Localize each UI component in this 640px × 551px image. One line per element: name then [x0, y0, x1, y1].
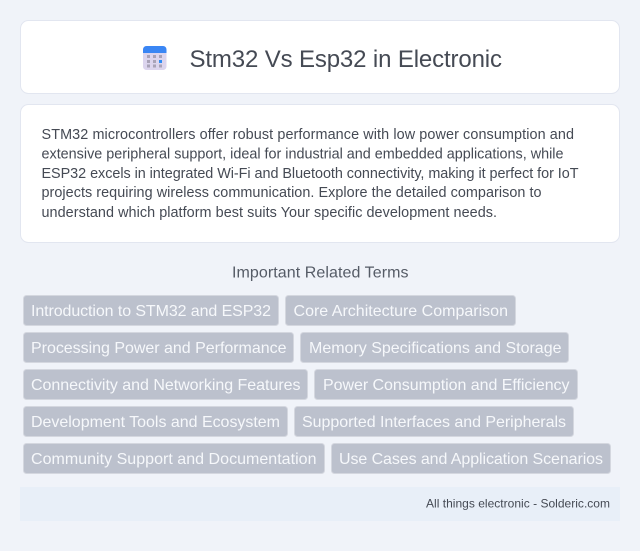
text block: description: ESP32 excels in integrated Wi-Fi and Bluetooth connectivity, making it perfect for IoT	[42, 166, 579, 182]
tag: Development Tools and Ecosystem	[31, 414, 280, 431]
tag: Connectivity and Networking Features	[31, 377, 300, 394]
tag: Introduction to STM32 and ESP32	[31, 303, 271, 320]
text block: description: projects requiring wireless communication. Explore the detailed comparison to	[42, 185, 542, 201]
tag	[332, 444, 610, 474]
tag: Core Architecture Comparison	[294, 303, 508, 320]
heading: related terms: Important Related Terms	[232, 264, 408, 282]
tag	[24, 332, 294, 362]
tag: Processing Power and Performance	[31, 340, 287, 357]
tag group: related terms	[24, 296, 610, 474]
title: Stm32 Vs Esp32 in Electronic	[190, 46, 502, 73]
text block: description	[42, 127, 579, 221]
tag	[294, 406, 574, 436]
header panel	[20, 20, 620, 94]
text block: description: STM32 microcontrollers offer robust performance with low power consumption and	[42, 127, 574, 143]
tag	[24, 406, 288, 436]
tag	[24, 444, 324, 474]
text block: description: understand which platform best suits Your specific development needs.	[42, 205, 497, 221]
tag	[24, 296, 278, 326]
footer credit: All things electronic - Solderic.com	[426, 496, 610, 510]
tag: Supported Interfaces and Peripherals	[302, 414, 566, 431]
panel: description	[20, 104, 620, 242]
icon: calendar grid	[143, 46, 166, 70]
tag: Use Cases and Application Scenarios	[339, 451, 603, 468]
tag	[24, 370, 308, 400]
tag: Community Support and Documentation	[31, 451, 316, 468]
footer	[20, 487, 620, 521]
tag	[300, 332, 568, 362]
tag	[314, 370, 578, 400]
tag: Power Consumption and Efficiency	[323, 377, 570, 394]
tag: Memory Specifications and Storage	[309, 340, 562, 357]
tag	[286, 296, 516, 326]
text block: description: extensive peripheral support, ideal for industrial and embedded applications, while	[42, 146, 564, 162]
